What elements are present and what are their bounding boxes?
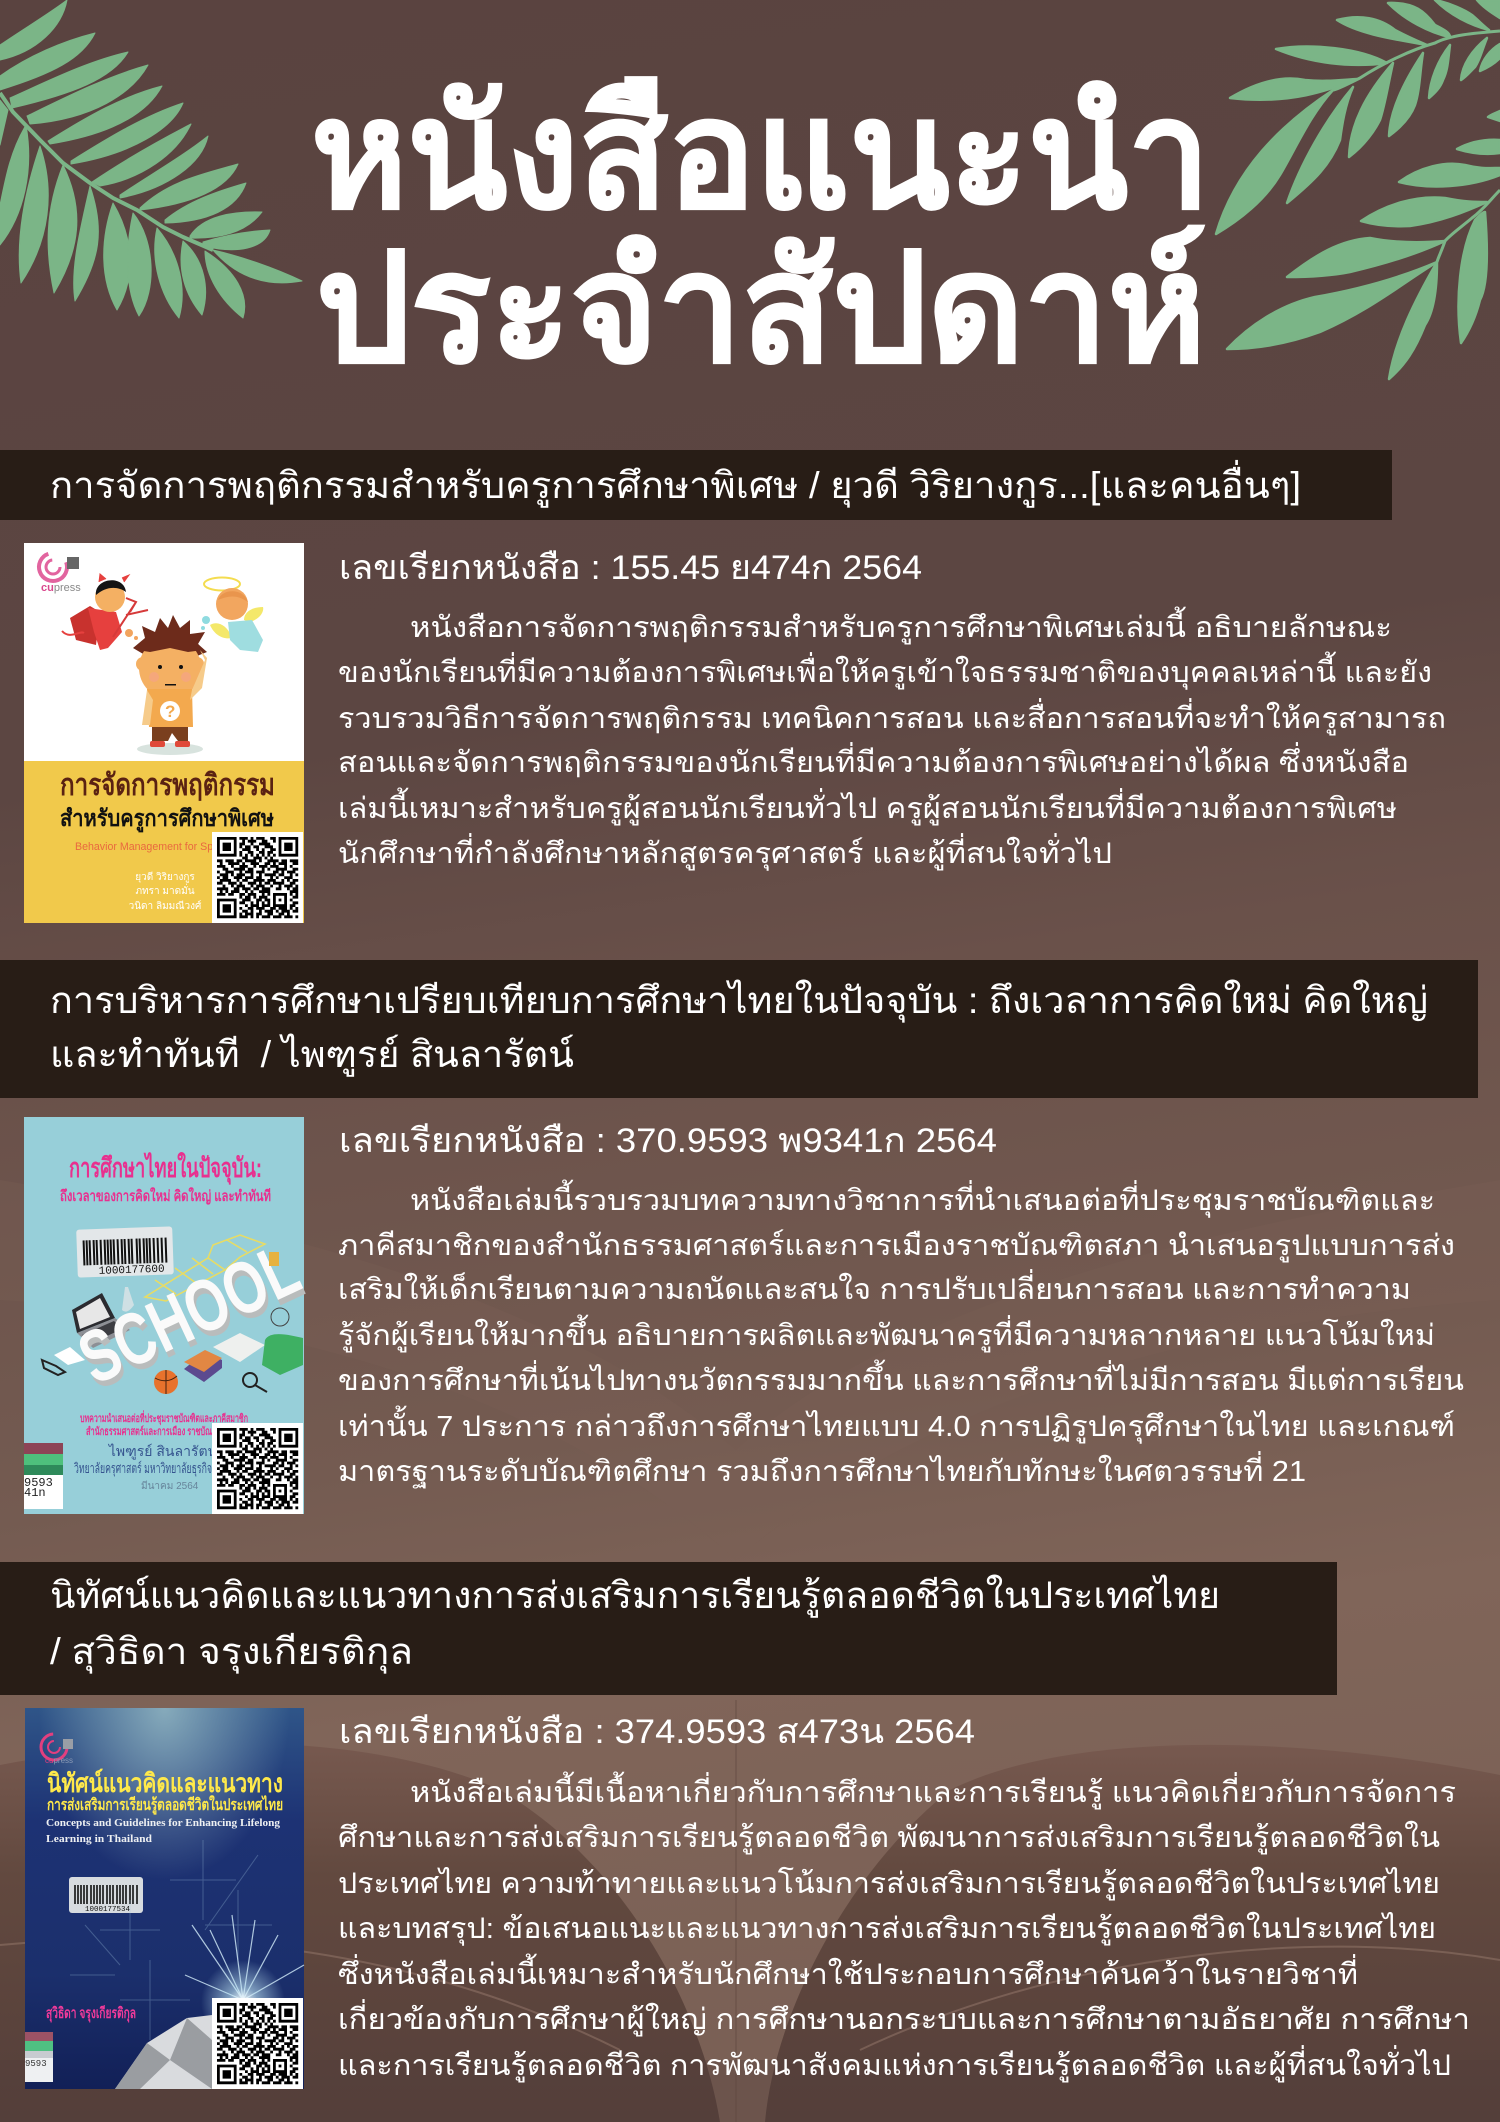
section 1: book recommendation [0,450,1446,923]
heading bar 1 [0,450,1392,520]
heading bar 2: การบริหารการศึกษาเปรียบเทียบการศึกษาไทยในปัจจุบัน : ถึงเวลาการคิดใหม่ คิดใหญ่ [50,979,1428,1023]
book cover 3: 1000177534 [85,1906,131,1914]
description 3: และการเรียนรู้ตลอดชีวิต การพัฒนาสังคมแห่งการเรียนรู้ตลอดชีวิต และผู้ที่สนใจทั่วไป [338,2045,1451,2083]
section 2: book recommendation [0,960,1478,1514]
book cover 2: SCHOOL [69,1232,314,1405]
description 1: ของนักเรียนที่มีความต้องการพิเศษเพื่อให้ครูเข้าใจธรรมชาติของบุคคลเหล่านี้ และยัง [338,651,1432,690]
book cover 3 [25,1708,304,2089]
book cover 2: สำนักธรรมศาสตร์และการเมือง ราชบัณ [86,1425,213,1438]
book cover 1: Behavior Management for Special [75,841,235,853]
book cover 2: วิทยาลัยครุศาสตร์ มหาวิทยาลัยธุรกิจ [74,1460,212,1477]
title [311,70,1210,394]
description 1 [338,606,1446,871]
description 1: เล่มนี้เหมาะสำหรับครูผู้สอนนักเรียนทั่วไป ครูผู้สอนนักเรียนที่มีความต้องการพิเศษ [338,787,1397,826]
leaf decoration: left frond [0,0,302,318]
heading bar 2 [0,960,1478,1098]
description 2: รู้จักผู้เรียนให้มากขึ้น อธิบายการผลิตและพัฒนาครูที่มีความหลากหลาย แนวโน้มใหม่ [338,1314,1435,1353]
heading bar 1: การจัดการพฤติกรรมสำหรับครูการศึกษาพิเศษ / ยุวดี วิริยางกูร...[และคนอื่นๆ] [50,459,1301,508]
book cover 2: ไพฑูรย์ สินลารัตน์ [108,1443,218,1460]
description 1: นักศึกษาที่กำลังศึกษาหลักสูตรครุศาสตร์ และผู้ที่สนใจทั่วไป [338,833,1112,871]
leaf decoration: right fronds [1216,0,1500,379]
book cover 2: 9593 [24,1476,53,1490]
description 3: หนังสือเล่มนี้มีเนื้อหาเกี่ยวกับการศึกษาและการเรียนรู้ แนวคิดเกี่ยวกับการจัดการ [410,1771,1456,1810]
description 2: เสริมให้เด็กเรียนตามความถนัดและสนใจ การปรับเปลี่ยนการสอน และการทำความ [338,1269,1411,1306]
book cover 2: มีนาคม 2564 [141,1480,199,1492]
book cover 3: Concepts and Guidelines for Enhancing Lifelong [46,1817,281,1829]
heading bar 3: นิทัศน์แนวคิดและแนวทางการส่งเสริมการเรียนรู้ตลอดชีวิตในประเทศไทย [50,1574,1220,1618]
book cover 1: cupress [41,582,81,594]
book cover 1 [24,543,304,923]
description 2 [338,1179,1464,1489]
description 2: มาตรฐานระดับบัณฑิตศึกษา รวมถึงการศึกษาไทยกับทักษะในศตวรรษที่ 21 [338,1451,1306,1489]
description 3: ซึ่งหนังสือเล่มนี้เหมาะสำหรับนักศึกษาใช้ประกอบการศึกษาค้นคว้าในรายวิชาที่ [338,1953,1358,1991]
book cover 1: สำหรับครูการศึกษาพิเศษ [60,805,274,833]
book cover 3: Learning in Thailand [46,1833,152,1845]
book cover 1: ? [165,702,175,721]
description 2: เท่านั้น 7 ประการ กล่าวถึงการศึกษาไทยแบบ 4.0 การปฏิรูปครุศึกษาในไทย และเกณฑ์ [338,1405,1455,1444]
description 3: เกี่ยวข้องกับการศึกษาผู้ใหญ่ การศึกษานอกระบบและการศึกษาตามอัธยาศัย การศึกษา [338,1999,1470,2037]
book cover 1: วนิดา ลิมมณีวงศ์ [129,900,202,912]
description 3: ศึกษาและการส่งเสริมการเรียนรู้ตลอดชีวิต พัฒนาการส่งเสริมการเรียนรู้ตลอดชีวิตใน [338,1820,1440,1855]
call number 1: เลขเรียกหนังสือ : 155.45 ย474ก 2564 [339,549,922,587]
book cover 2: ถึงเวลาของการคิดใหม่ คิดใหญ่ และทำทันที [60,1187,271,1205]
description 3: ประเทศไทย ความท้าทายและแนวโน้มการส่งเสริมการเรียนรู้ตลอดชีวิตในประเทศไทย [338,1866,1440,1901]
heading bar 3 [0,1562,1337,1695]
description 2: ของการศึกษาที่เน้นไปทางนวัตกรรมมากขึ้น และการศึกษาที่ไม่มีการสอน มีแต่การเรียน [338,1359,1464,1397]
book cover 3: นิทัศน์แนวคิดและแนวทาง [47,1768,283,1798]
book cover 3: การส่งเสริมการเรียนรู้ตลอดชีวิตในประเทศไทย [47,1795,283,1816]
book cover 2: 1000177600 [98,1264,165,1278]
call number 3: เลขเรียกหนังสือ : 374.9593 ส473น 2564 [339,1713,975,1751]
description 2: หนังสือเล่มนี้รวบรวมบทความทางวิชาการที่นำเสนอต่อที่ประชุมราชบัณฑิตและ [410,1179,1435,1218]
book cover 1: การจัดการพฤติกรรม [60,769,275,802]
book cover 3: สุวิธิดา จรุงเกียรติกุล [46,2004,136,2023]
book cover 2 [24,1117,314,1514]
description 3: และบทสรุป: ข้อเสนอแนะและแนวทางการส่งเสริมการเรียนรู้ตลอดชีวิตในประเทศไทย [338,1911,1436,1946]
book cover 3: 9593 [25,2059,47,2069]
description 1: หนังสือการจัดการพฤติกรรมสำหรับครูการศึกษาพิเศษเล่มนี้ อธิบายลักษณะ [410,606,1392,645]
book cover 2: SCHOOL [66,1227,312,1400]
book cover 1: ภทรา มาดมั่น [135,883,195,897]
description 2: ภาคีสมาชิกของสำนักธรรมศาสตร์และการเมืองราชบัณฑิตสภา นำเสนอรูปแบบการส่ง [338,1229,1455,1263]
description 3 [338,1771,1470,2083]
section 3: book recommendation [0,1562,1470,2089]
book cover 2: การศึกษาไทยในปัจจุบัน: [69,1152,262,1185]
heading bar 3: / สุวิธิดา จรุงเกียรติกุล [50,1631,413,1674]
book cover 2: 41n [24,1486,46,1500]
title: หนังสือแนะนำ [311,70,1210,240]
book cover 2: บทความนำเสนอต่อที่ประชุมราชบัณฑิตและภาคีสมาชิก [80,1410,248,1426]
book cover 1: ยุวดี วิริยางกูร [135,871,195,883]
title: ประจำสัปดาห์ [316,224,1206,394]
call number 2: เลขเรียกหนังสือ : 370.9593 พ9341ก 2564 [339,1122,997,1160]
description 1: สอนและจัดการพฤติกรรมของนักเรียนที่มีความต้องการพิเศษอย่างได้ผล ซึ่งหนังสือ [338,742,1409,779]
heading bar 2: และทำทันที / ไพฑูรย์ สินลารัตน์ [50,1033,574,1077]
description 1: รวบรวมวิธีการจัดการพฤติกรรม เทคนิคการสอน และสื่อการสอนที่จะทำให้ครูสามารถ [338,698,1446,736]
book cover 3: cupress [45,1756,73,1765]
